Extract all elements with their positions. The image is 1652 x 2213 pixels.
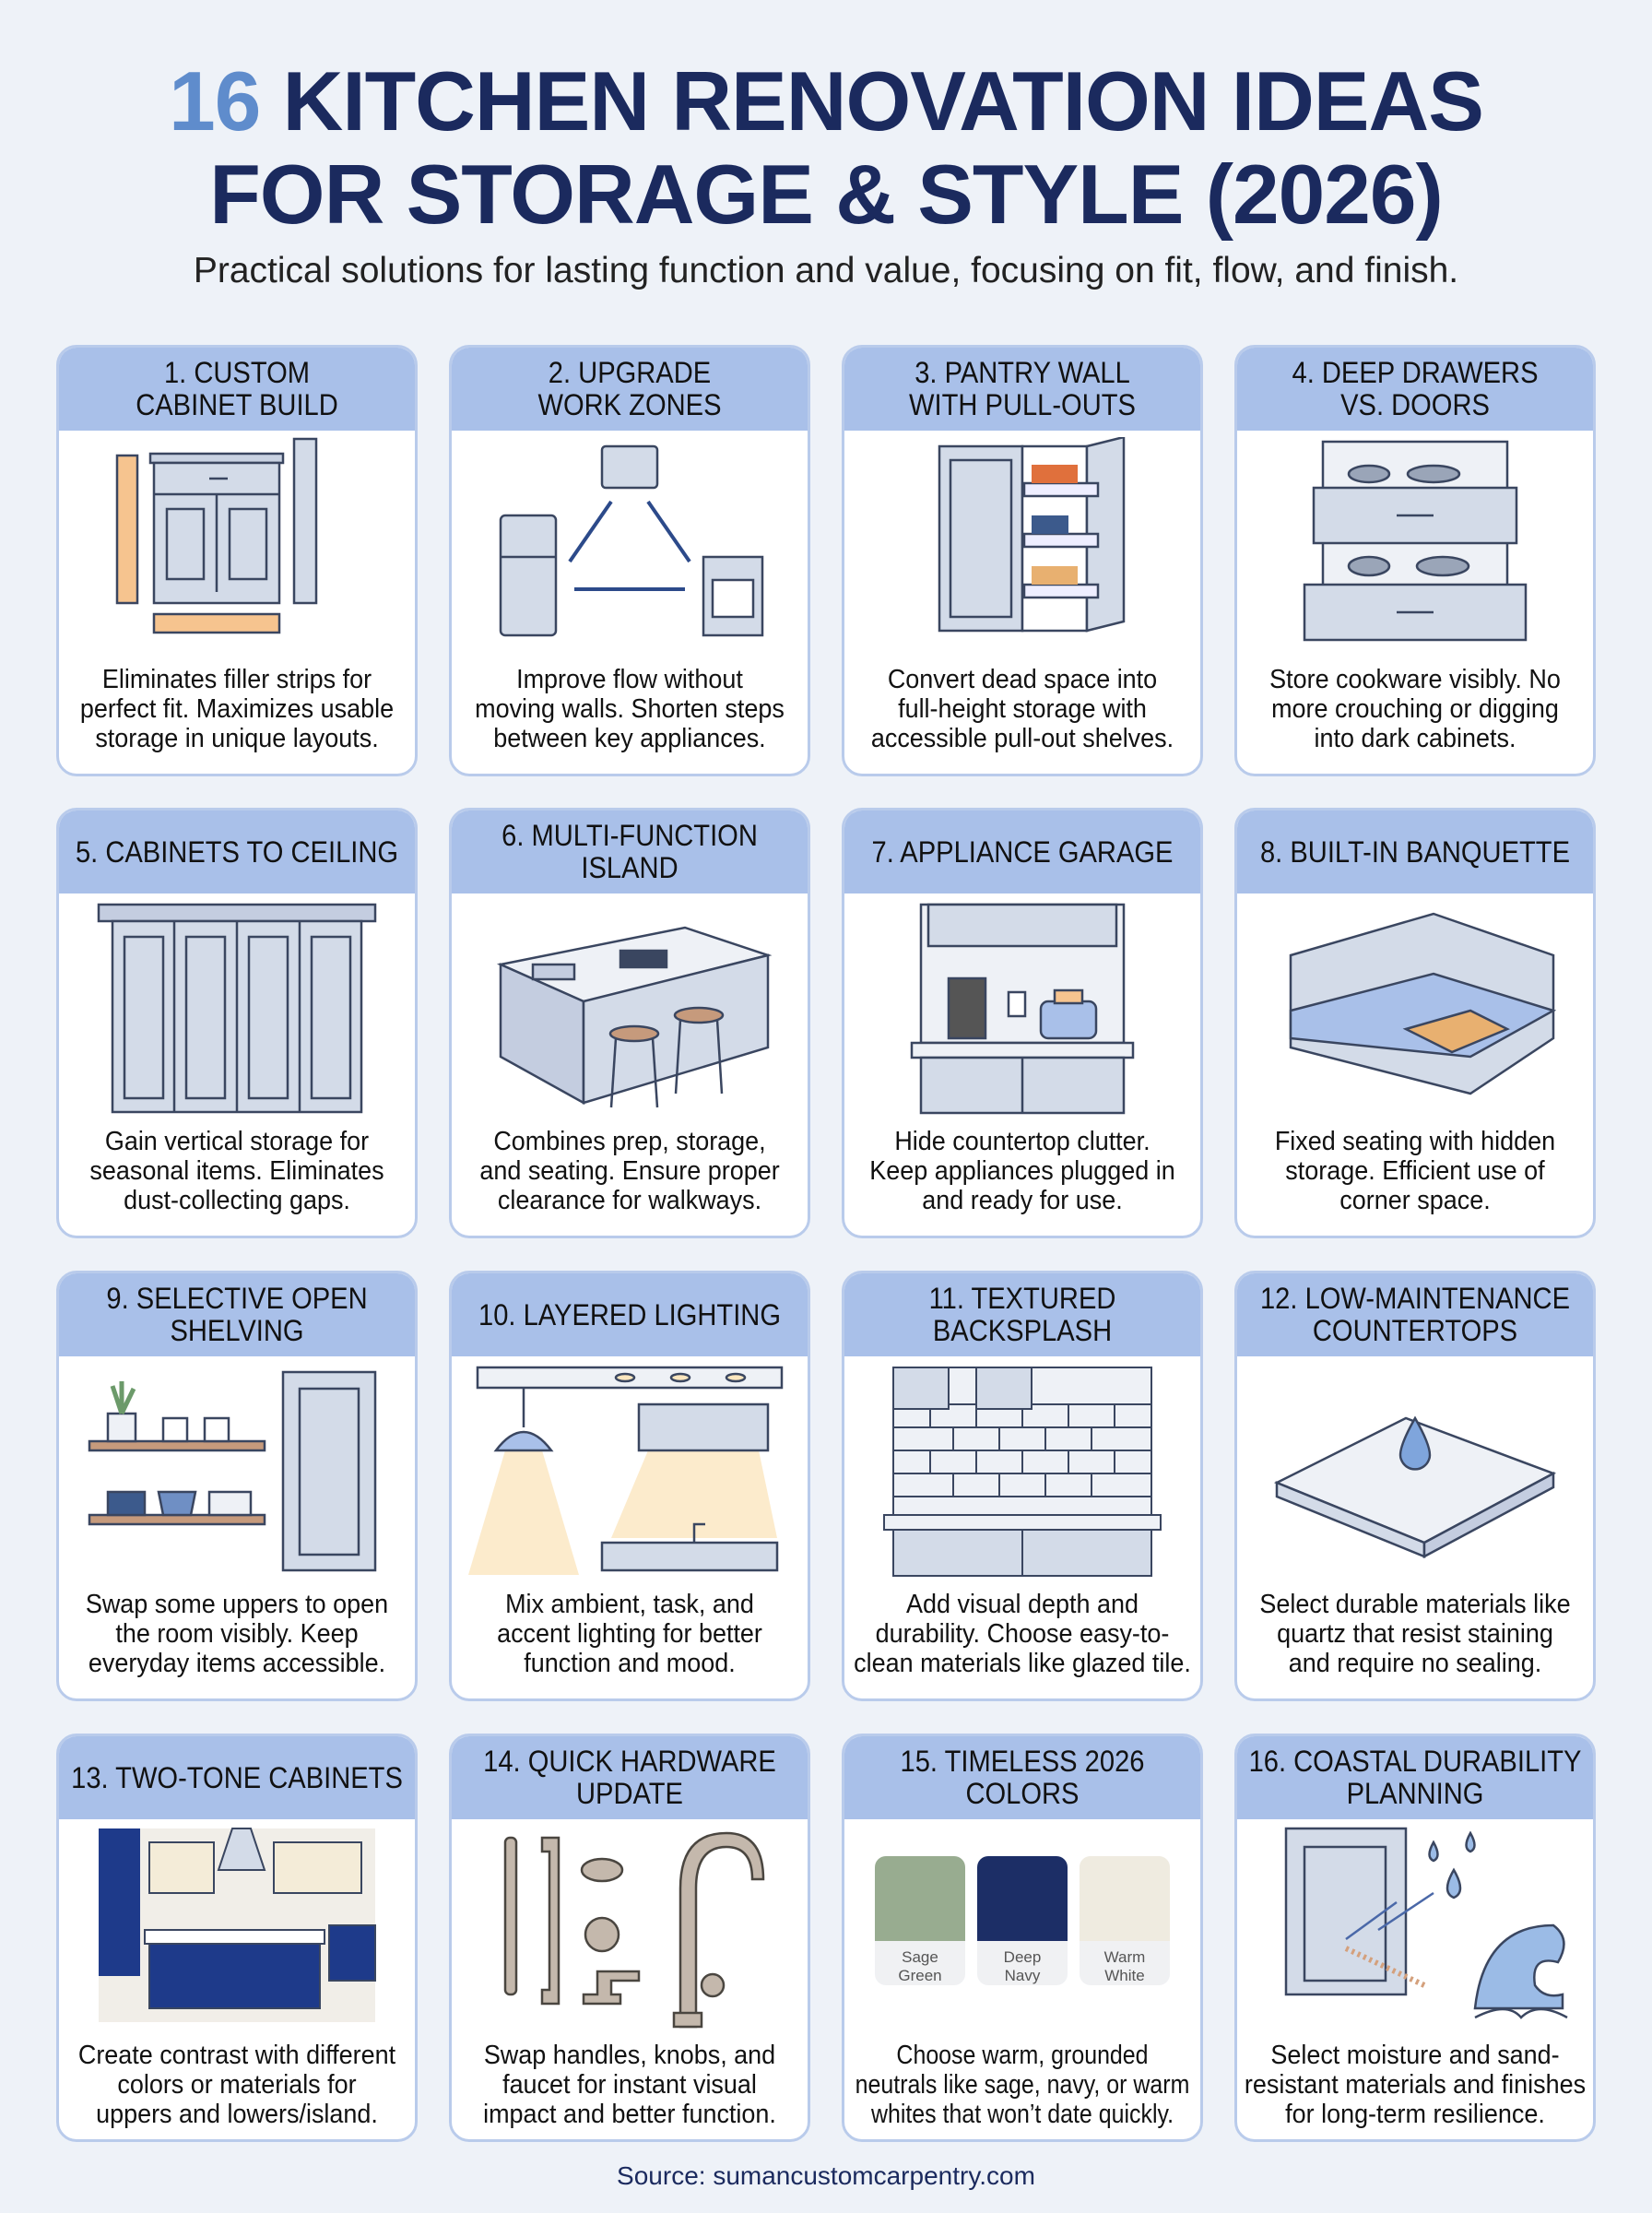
title: FOR STORAGE & STYLE (2026) (209, 148, 1443, 242)
description: storage in unique layouts. (95, 724, 379, 753)
heading (1237, 1273, 1593, 1356)
heading: COLORS (966, 1777, 1079, 1810)
heading: SHELVING (170, 1314, 304, 1347)
description: storage. Efficient use of (1285, 1156, 1545, 1186)
heading (59, 1273, 415, 1356)
icon: work triangle (500, 444, 763, 636)
panel: upgrade work zones (449, 345, 810, 776)
description (1259, 1590, 1571, 1678)
description: uppers and lowers/island. (96, 2100, 378, 2129)
description: seasonal items. Eliminates (89, 1156, 384, 1186)
panel: timeless colors (842, 1734, 1203, 2142)
description (80, 665, 394, 753)
panel: quick hardware update (449, 1734, 810, 2142)
panel: textured backsplash (842, 1271, 1203, 1701)
icon: lighting (468, 1367, 784, 1575)
description (1275, 1127, 1555, 1215)
heading (844, 1273, 1200, 1356)
icon: color swatches: White (1104, 1967, 1145, 1984)
description: moving walls. Shorten steps (475, 694, 785, 724)
description: Fixed seating with hidden (1275, 1127, 1555, 1156)
icon: cabinet, water, wave (1285, 1828, 1568, 2019)
heading: WITH PULL-OUTS (909, 388, 1136, 421)
heading (59, 1736, 415, 1819)
description: Select durable materials like (1259, 1590, 1571, 1619)
description: accessible pull-out shelves. (871, 724, 1174, 753)
icon: hardware (503, 1831, 765, 2029)
description: Swap handles, knobs, and (484, 2041, 775, 2070)
description (78, 2041, 395, 2129)
description: Improve flow without (516, 665, 743, 694)
description: between key appliances. (493, 724, 766, 753)
description: Gain vertical storage for (105, 1127, 369, 1156)
icon: color swatches: Sage (902, 1948, 938, 1966)
description: and seating. Ensure proper (479, 1156, 780, 1186)
description: clean materials like glazed tile. (854, 1649, 1191, 1678)
icon: color swatches: Green (898, 1967, 942, 1984)
description: for long-term resilience. (1285, 2100, 1545, 2129)
description (497, 1590, 762, 1678)
description (86, 1590, 388, 1678)
heading: 11. TEXTURED (929, 1282, 1115, 1315)
description (1245, 2041, 1586, 2129)
panel: coastal durability (1234, 1734, 1596, 2142)
description: Store cookware visibly. No (1269, 665, 1561, 694)
description: Mix ambient, task, and (505, 1590, 754, 1619)
description: full-height storage with (898, 694, 1147, 724)
icon: drawers (1304, 441, 1527, 642)
heading (452, 1736, 808, 1819)
description (869, 1127, 1175, 1215)
panel: selective open shelving (56, 1271, 418, 1701)
heading: 2. UPGRADE (549, 356, 711, 389)
heading: 8. BUILT-IN BANQUETTE (1260, 835, 1570, 869)
icon: color swatches: Deep (1004, 1948, 1041, 1966)
heading (452, 811, 808, 893)
description: clearance for walkways. (498, 1186, 761, 1215)
heading: ISLAND (581, 851, 678, 884)
heading: BACKSPLASH (933, 1314, 1112, 1347)
heading (59, 348, 415, 431)
heading: 9. SELECTIVE OPEN (106, 1282, 368, 1315)
heading: 13. TWO-TONE CABINETS (71, 1761, 403, 1794)
panel: appliance garage (842, 808, 1203, 1238)
description: Combines prep, storage, (493, 1127, 766, 1156)
description: accent lighting for better (497, 1619, 762, 1649)
description (854, 1590, 1191, 1678)
description: Eliminates filler strips for (102, 665, 372, 694)
heading (1237, 811, 1593, 893)
panel: pantry wall (842, 345, 1203, 776)
description: the room visibly. Keep (115, 1619, 359, 1649)
description: whites that won’t date quickly. (871, 2100, 1174, 2129)
heading: 16. COASTAL DURABILITY (1249, 1745, 1581, 1778)
description: resistant materials and finishes (1245, 2070, 1586, 2100)
icon: pantry (938, 437, 1125, 633)
description: Select moisture and sand- (1270, 2041, 1560, 2070)
heading (844, 348, 1200, 431)
description (483, 2041, 776, 2129)
panel: two-tone cabinets (56, 1734, 418, 2142)
panel: built-in banquette (1234, 808, 1596, 1238)
description: Convert dead space into (888, 665, 1157, 694)
description: perfect fit. Maximizes usable (80, 694, 394, 724)
description: impact and better function. (483, 2100, 776, 2129)
panel: custom cabinet build (56, 345, 418, 776)
heading (844, 1736, 1200, 1819)
description (475, 665, 785, 753)
heading (59, 811, 415, 893)
heading: 10. LAYERED LIGHTING (478, 1298, 781, 1331)
description (1269, 665, 1561, 753)
icon: color swatches: Warm (1104, 1948, 1145, 1966)
description: dust-collecting gaps. (124, 1186, 350, 1215)
heading: PLANNING (1347, 1777, 1483, 1810)
heading (1237, 1736, 1593, 1819)
heading (452, 1273, 808, 1356)
description: Keep appliances plugged in (869, 1156, 1175, 1186)
description: quartz that resist staining (1277, 1619, 1553, 1649)
icon: shelves (88, 1370, 376, 1571)
title (169, 55, 1483, 242)
description: Hide countertop clutter. (894, 1127, 1150, 1156)
heading: 6. MULTI-FUNCTION (502, 819, 758, 852)
heading: 12. LOW-MAINTENANCE (1260, 1282, 1570, 1315)
subtitle: Practical solutions for lasting function and value, focusing on fit, flow, and finish. (194, 251, 1458, 290)
description (871, 665, 1174, 753)
icon: banquette (1289, 913, 1556, 1095)
icon: tall cabinets (98, 904, 376, 1114)
description: and require no sealing. (1289, 1649, 1541, 1678)
panel: low-maintenance countertops (1234, 1271, 1596, 1701)
description: colors or materials for (117, 2070, 357, 2100)
panel: layered lighting (449, 1271, 810, 1701)
icon: cabinet with rulers (116, 437, 317, 634)
heading: 5. CABINETS TO CEILING (76, 835, 398, 869)
heading (452, 348, 808, 431)
panel: cabinets to ceiling (56, 808, 418, 1238)
description: Add visual depth and (906, 1590, 1139, 1619)
description: Choose warm, grounded (896, 2041, 1149, 2070)
icon: color swatches: Navy (1005, 1967, 1041, 1984)
icon: color swatches (875, 1856, 1170, 1985)
heading: UPDATE (576, 1777, 683, 1810)
description: into dark cabinets. (1315, 724, 1516, 753)
heading: 14. QUICK HARDWARE (483, 1745, 776, 1778)
icon: countertop with drop (1274, 1416, 1556, 1558)
description: function and mood. (524, 1649, 736, 1678)
description: more crouching or digging (1271, 694, 1559, 724)
heading: 15. TIMELESS 2026 (901, 1745, 1144, 1778)
icon: two-tone kitchen (99, 1828, 376, 2022)
heading: 1. CUSTOM (164, 356, 310, 389)
panel: deep drawers (1234, 345, 1596, 776)
heading: COUNTERTOPS (1313, 1314, 1517, 1347)
icon: island with stools (497, 926, 773, 1108)
description: durability. Choose easy-to- (876, 1619, 1169, 1649)
description (89, 1127, 384, 1215)
title: 16 KITCHEN RENOVATION IDEAS (169, 55, 1483, 148)
heading: 4. DEEP DRAWERS (1292, 356, 1538, 389)
description: Create contrast with different (78, 2041, 395, 2070)
heading: WORK ZONES (537, 388, 721, 421)
description (479, 1127, 780, 1215)
description: neutrals like sage, navy, or warm (856, 2070, 1189, 2100)
heading: VS. DOORS (1340, 388, 1490, 421)
source footer: Source: sumancustomcarpentry.com (617, 2161, 1035, 2190)
description: faucet for instant visual (502, 2070, 757, 2100)
description: and ready for use. (922, 1186, 1123, 1215)
heading (844, 811, 1200, 893)
panel: multi-function island (449, 808, 810, 1238)
icon: tile backsplash (883, 1367, 1162, 1577)
description: corner space. (1339, 1186, 1491, 1215)
description: everyday items accessible. (88, 1649, 385, 1678)
heading: CABINET BUILD (136, 388, 338, 421)
icon: appliance garage (911, 904, 1134, 1114)
description: Swap some uppers to open (86, 1590, 388, 1619)
heading: 3. PANTRY WALL (914, 356, 1130, 389)
description (856, 2041, 1189, 2129)
heading (1237, 348, 1593, 431)
heading: 7. APPLIANCE GARAGE (872, 835, 1173, 869)
